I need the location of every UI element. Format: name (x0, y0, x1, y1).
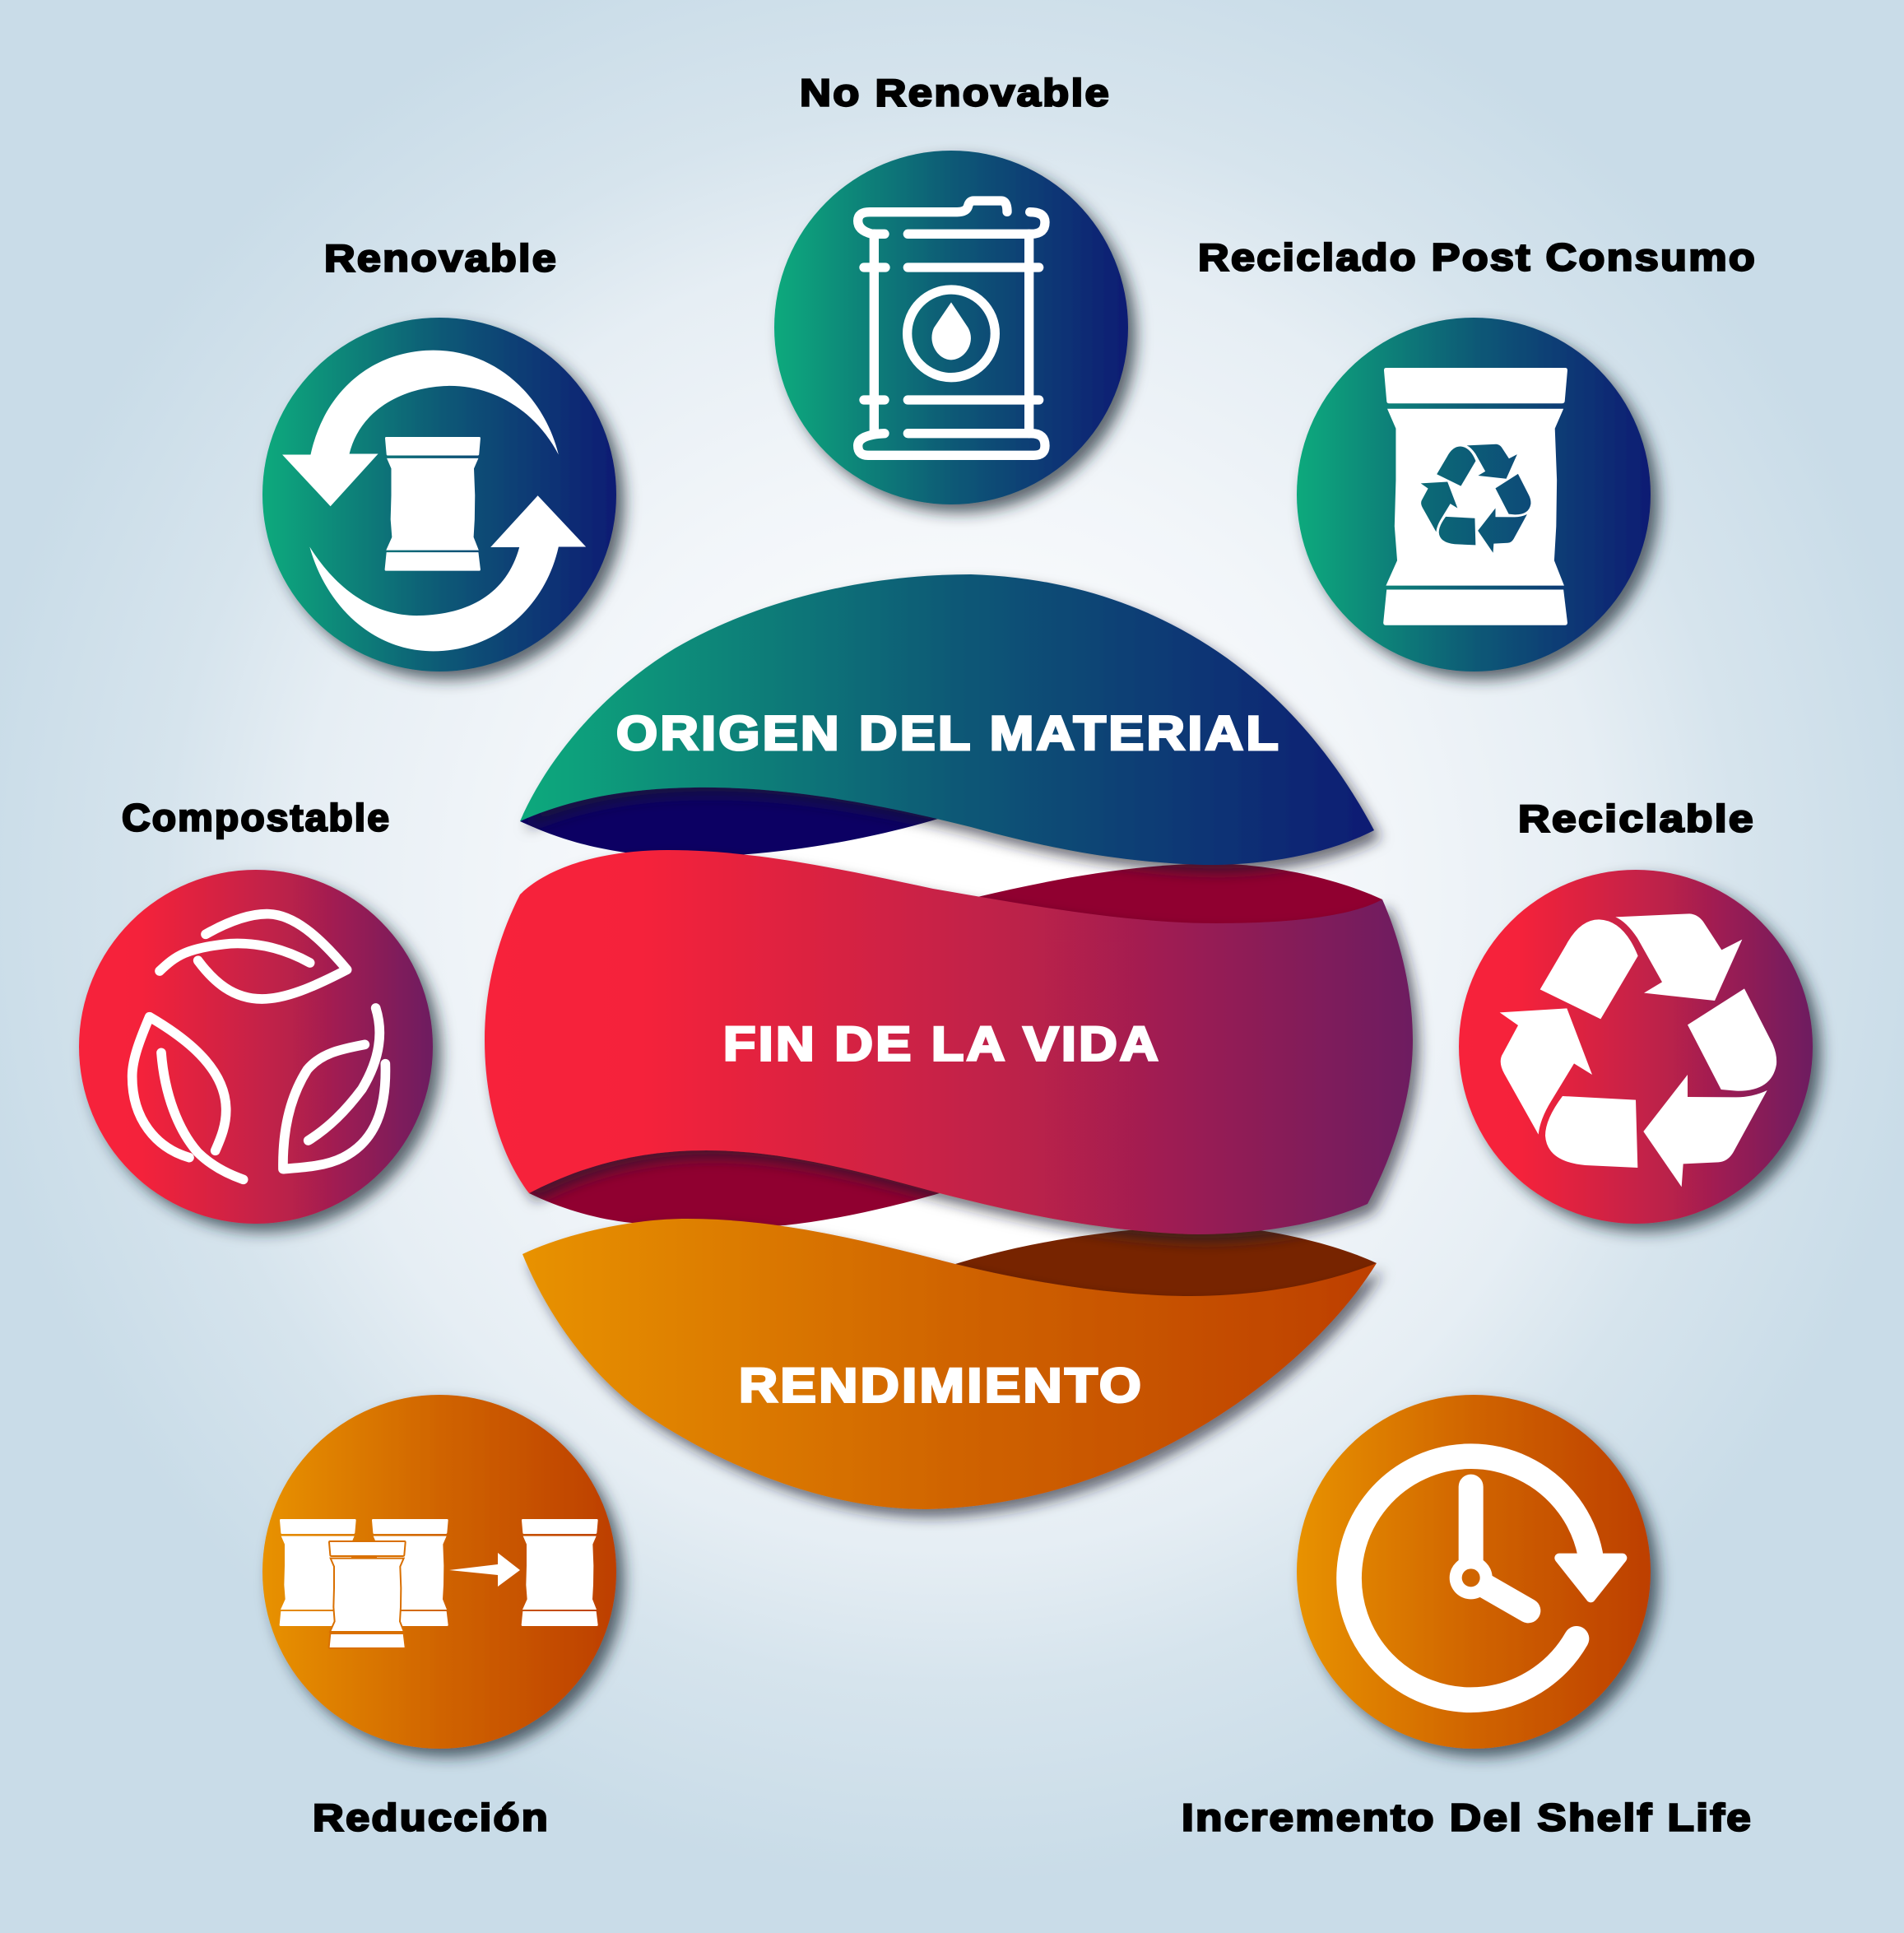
band: rendimiento (522, 1219, 1377, 1509)
dark fold: fin de la vida bottom (529, 1142, 940, 1227)
heading: fin de la vida: FIN DE LA VIDA (723, 1017, 1161, 1071)
label: incremento del shelf life: Incremento Del Shelf Life (1182, 1796, 1753, 1838)
label: renovable: Renovable (324, 237, 558, 280)
circle: reducción (262, 1395, 616, 1749)
icon: pouches reduced (280, 1519, 598, 1648)
label: reducción: Reducción (313, 1796, 550, 1838)
circle: renovable (262, 318, 616, 671)
icon: oil barrel (858, 201, 1045, 455)
label: reciclado post consumo: Reciclado Post Consumo (1198, 235, 1757, 278)
circle: compostable (79, 870, 433, 1224)
icon: three leaves (132, 914, 385, 1179)
circle: reciclable (1459, 870, 1813, 1224)
icon: clock with arrow (1349, 1457, 1623, 1700)
band: origen del material (520, 574, 1374, 865)
heading: origen del material: ORIGEN DEL MATERIAL (616, 707, 1281, 760)
icon: pouch (1383, 368, 1567, 625)
label: compostable: Compostable (122, 797, 391, 839)
heading: rendimiento: RENDIMIENTO (739, 1359, 1144, 1412)
central sphere diagram (485, 574, 1413, 1509)
dark fold: rendimiento (955, 1229, 1377, 1307)
icon: recycling symbol on pouch (1421, 444, 1530, 553)
band: fin de la vida (485, 850, 1413, 1234)
label: no renovable: No Renovable (800, 71, 1111, 114)
circle: reciclado post consumo (1297, 318, 1651, 671)
icon: cycle arrows (282, 351, 586, 651)
circle: incremento del shelf life (1297, 1395, 1651, 1749)
icon: pouch (385, 437, 481, 571)
dark fold: origen (520, 781, 971, 857)
circle: no renovable (774, 151, 1128, 504)
white gaps between bands (759, 818, 1204, 1264)
label: reciclable: Reciclable (1518, 797, 1755, 839)
dark fold: fin de la vida top (978, 863, 1382, 932)
icon: recycling symbol (1500, 913, 1776, 1187)
